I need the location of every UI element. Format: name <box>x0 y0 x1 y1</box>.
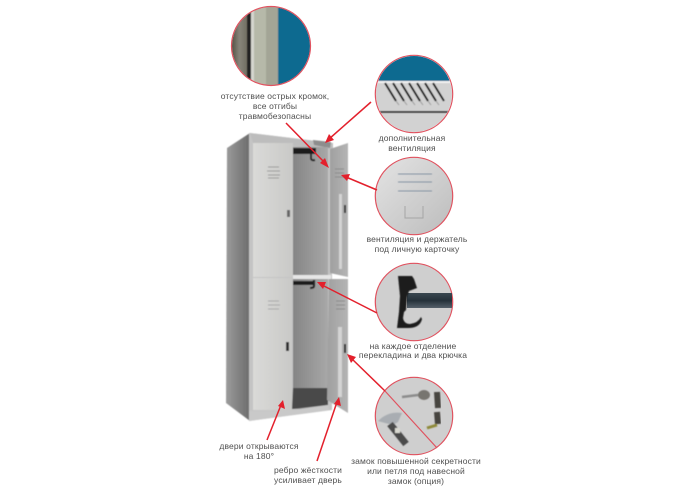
caption: extra ventilation: вентиляция <box>388 143 436 153</box>
caption: stiffening rib <box>274 465 342 485</box>
caption: ventilation and card holder: вентиляция и держатель <box>367 234 468 244</box>
caption: sharp edges: все отгибы <box>253 101 297 111</box>
caption: extra ventilation <box>379 133 446 153</box>
locker hanger rail upper <box>293 148 316 160</box>
arrow: card holder <box>341 174 377 190</box>
arrow: door opening <box>267 400 285 440</box>
locker front frame <box>249 133 332 421</box>
locker interior upper <box>293 147 328 277</box>
locker floor <box>292 388 328 409</box>
arrow: sharp edges <box>286 123 329 168</box>
locker interior lower <box>293 279 328 409</box>
detail circle: lock options <box>375 377 453 455</box>
locker top vent strip <box>250 133 333 149</box>
hook <box>397 276 422 328</box>
caption: door opening: на 180° <box>244 451 274 461</box>
detail circle: rounded edges <box>231 6 312 86</box>
locker open upper door <box>330 143 348 277</box>
caption: door opening: двери открываются <box>219 441 299 451</box>
locker hanger rail lower <box>293 280 314 288</box>
caption: lock options: замок повышенной секретности <box>351 456 481 466</box>
locker open lower door <box>327 279 348 413</box>
locker cabinet <box>226 133 348 421</box>
caption: stiffening rib: усиливает дверь <box>274 475 342 485</box>
arrow: lock <box>347 354 385 391</box>
caption: lock options: замок (опция) <box>388 476 444 486</box>
detail circle: ventilation and card holder <box>375 157 453 235</box>
caption: crossbar and hooks: перекладина и два крючка <box>359 350 467 360</box>
arrow: stiffening rib <box>317 397 341 461</box>
arrow: extra ventilation <box>325 102 371 143</box>
locker base <box>249 405 329 421</box>
arrow: crossbar <box>317 282 377 313</box>
detail circle: extra ventilation <box>375 55 453 133</box>
caption: ventilation and card holder: под личную карточку <box>375 244 460 254</box>
caption: lock options <box>351 456 481 486</box>
lock cylinder <box>437 392 438 424</box>
caption: sharp edges: травмобезопасны <box>239 111 311 121</box>
locker upper left door <box>253 143 293 277</box>
caption: crossbar and hooks: на каждое отделение <box>370 341 457 351</box>
detail circle: crossbar and hooks <box>375 263 453 341</box>
caption: extra ventilation: дополнительная <box>379 133 446 143</box>
caption: lock options: или петля под навесной <box>367 466 465 476</box>
crossbar <box>407 293 452 308</box>
caption: ventilation and card holder <box>367 234 468 254</box>
T handle lock <box>378 413 402 425</box>
locker side panel <box>226 133 250 421</box>
locker shelf <box>293 275 331 279</box>
caption: sharp edges: отсутствие острых кромок, <box>221 91 329 101</box>
locker lower left door <box>253 278 292 410</box>
caption: door opening <box>219 441 299 461</box>
strike-through line <box>385 391 437 448</box>
caption: stiffening rib: ребро жёсткости <box>274 465 342 475</box>
lock key <box>402 395 418 397</box>
caption: crossbar and hooks <box>359 341 467 360</box>
caption: sharp edges <box>221 91 329 121</box>
